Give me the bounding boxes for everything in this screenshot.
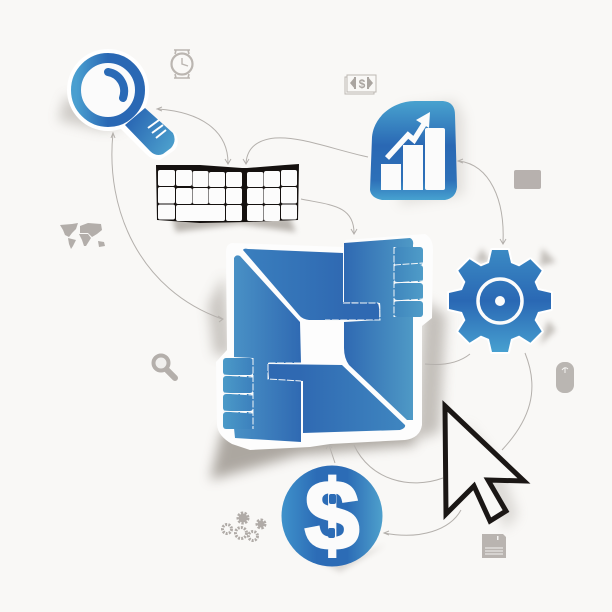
handle	[125, 108, 175, 155]
lens ring	[76, 58, 140, 122]
bottom hand	[268, 364, 405, 433]
icon: small magnifier	[154, 356, 175, 378]
dollar counters	[328, 494, 336, 538]
icon: wristwatch	[172, 50, 192, 78]
right fingers	[394, 247, 423, 317]
icon: magnifying glass	[67, 49, 178, 160]
finger and thumb seams	[223, 247, 423, 429]
icon: grey folder tile	[514, 170, 541, 189]
gear ring	[478, 279, 522, 323]
right hand	[344, 238, 413, 420]
panel: hands shaking sticker	[216, 234, 433, 450]
bars	[381, 128, 445, 190]
icon: bar chart badge	[370, 101, 457, 200]
icon: gear	[449, 250, 551, 352]
icon: banknotes	[345, 75, 376, 94]
dollar label: $	[359, 77, 366, 91]
growth arrow	[387, 112, 430, 158]
lens glare	[108, 72, 124, 98]
gear hub	[495, 296, 505, 306]
connector arrows	[111, 107, 532, 535]
icon: floppy disk	[482, 534, 506, 558]
keys	[158, 170, 297, 221]
drop shadows	[58, 95, 556, 572]
icon: world map	[60, 223, 105, 249]
dollar sign: $	[305, 460, 359, 570]
icon: cluster of gears	[222, 514, 264, 540]
icon: keyboard	[156, 164, 299, 223]
left hand	[234, 255, 301, 442]
left fingers	[223, 358, 253, 429]
icon: dollar coin	[282, 460, 382, 570]
handle grip marks	[148, 120, 166, 138]
top hand	[243, 249, 379, 320]
icon: computer mouse	[556, 362, 574, 393]
icon: cursor arrow	[445, 406, 524, 521]
